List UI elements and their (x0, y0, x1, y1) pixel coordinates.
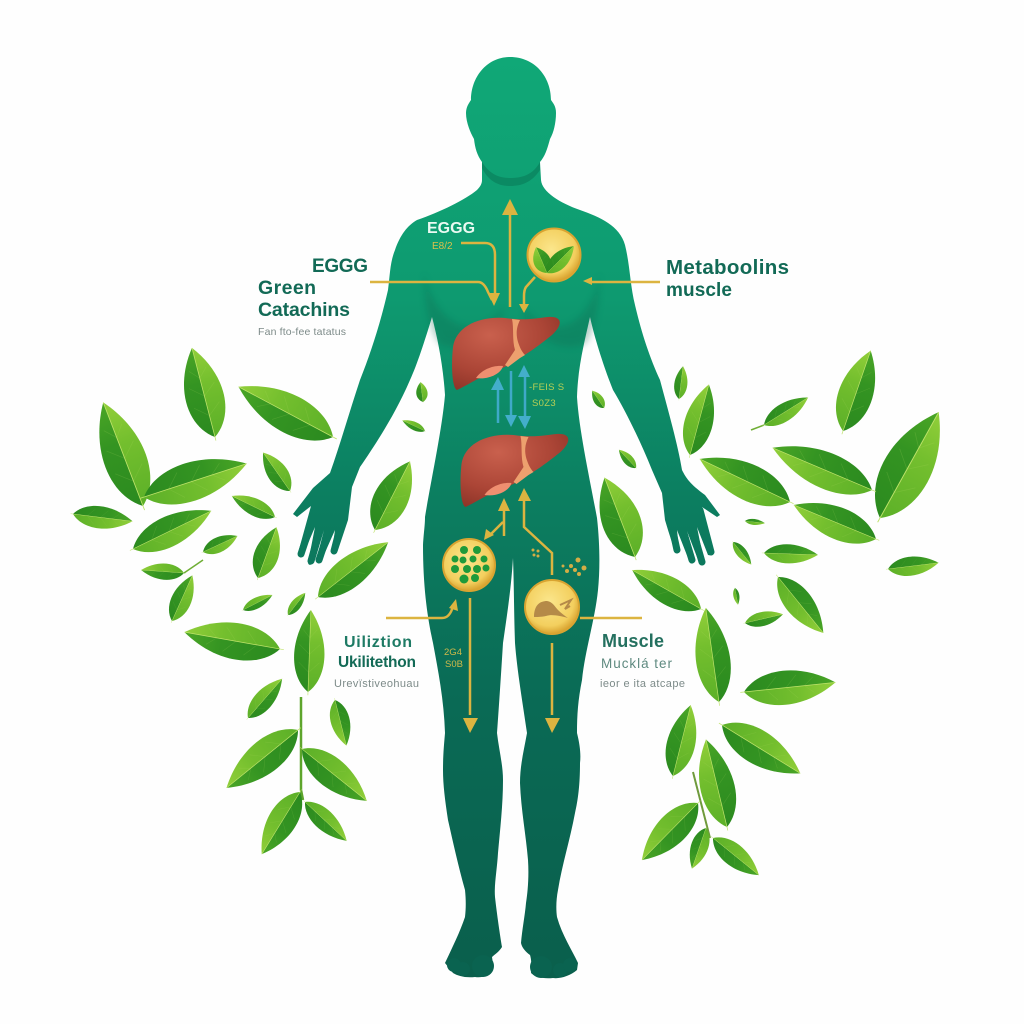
arrow: left callout line to liver (370, 282, 492, 300)
label: green catechins: Green (258, 277, 316, 299)
label: utilization: Ukilitethon (338, 654, 416, 671)
leaves: small central (401, 381, 654, 567)
arrow: left leg down (463, 598, 478, 733)
label: green catechins: Fan fto-fee tatatus (258, 326, 346, 338)
chest shading (424, 272, 600, 347)
arrow: right leg down (545, 643, 560, 733)
liver: upper (452, 317, 560, 390)
label: utilization: Uiliztion (344, 634, 412, 651)
label: metabolins muscle: Metaboolins (666, 256, 789, 279)
EGGG label on chest (427, 220, 475, 252)
liver: lower (461, 434, 568, 507)
leaves: left upper cluster (69, 343, 425, 627)
label: metabolins muscle (666, 256, 789, 301)
line: muscle callout (580, 617, 642, 619)
label: green catechins (258, 256, 368, 338)
small label between livers: S0Z3 (532, 398, 556, 409)
arrow: leaf circle to liver (519, 277, 535, 313)
small label between livers (529, 382, 564, 409)
fingers: left hand (301, 516, 343, 561)
label: green catechins: EGGG (312, 256, 368, 277)
toes: right foot (530, 956, 577, 978)
icon: tea leaf in gold circle (528, 228, 580, 282)
EGGG label on chest: E8/2 (432, 241, 453, 252)
small label between livers: -FEIS S (529, 382, 564, 393)
small label on left leg: S0B (445, 659, 463, 670)
leaves: right lower cluster (625, 558, 837, 884)
EGGG label on chest: EGGG (427, 220, 475, 237)
icon: cell circle with green dots (443, 539, 495, 591)
label: muscle (600, 631, 685, 690)
small label on left leg: 2G4 (444, 647, 462, 658)
arrow: from EGGG label to liver (461, 243, 500, 306)
toes: left foot (447, 955, 494, 977)
label: green catechins: Catachins (258, 299, 350, 321)
human body silhouette (293, 57, 720, 978)
label: muscle: Mucklá ter (601, 656, 672, 671)
label: muscle: ieor e ita atcape (600, 678, 685, 690)
icon: muscle circle (525, 580, 579, 634)
label: utilization (334, 634, 419, 690)
label: metabolins muscle: muscle (666, 280, 732, 301)
label: muscle: Muscle (602, 631, 664, 651)
blue arrows between livers (491, 365, 531, 429)
arrow: utilization callout (386, 599, 458, 618)
arrows into lower liver (484, 488, 552, 575)
fingers: right hand (670, 510, 711, 562)
arrow: long gold up arrow (502, 199, 518, 307)
arrow: right callout line (583, 277, 660, 285)
small scattered particles (532, 548, 586, 576)
label: utilization: Urevïstiveohuau (334, 678, 419, 690)
small label on left leg (444, 647, 463, 670)
leaves: left lower cluster (181, 590, 376, 862)
neck shadow (482, 162, 540, 186)
leaves: right upper cluster (672, 345, 960, 642)
